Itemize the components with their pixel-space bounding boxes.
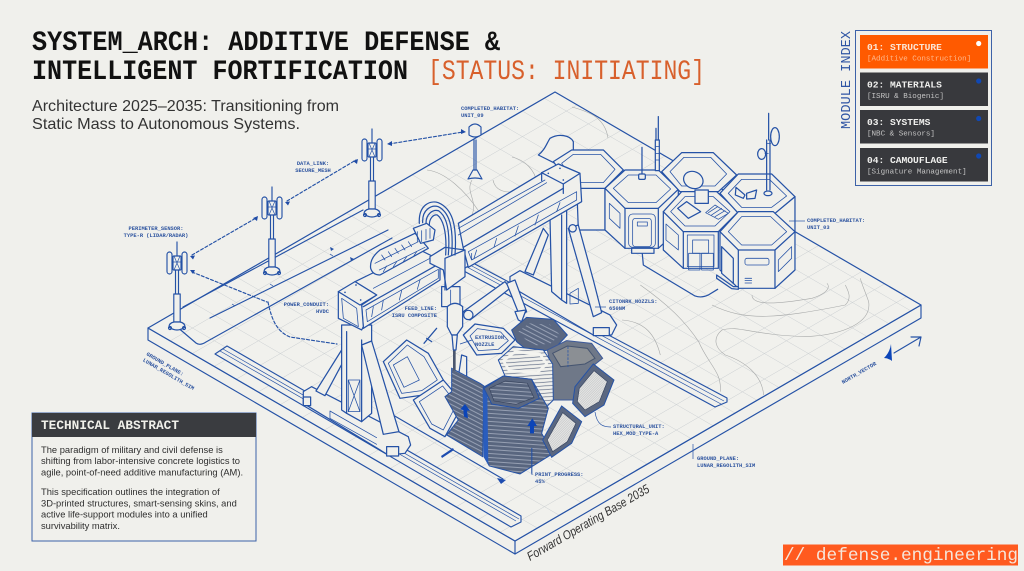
module 01 structure <box>860 35 988 68</box>
label: ground plane right: LUNAR_REGOLITH_SIM <box>697 463 755 469</box>
module 04 camouflage: 04: CAMOUFLAGE <box>867 155 948 166</box>
dome behind habitat <box>538 135 573 163</box>
left printed wall <box>445 368 484 457</box>
subtitle <box>32 98 339 133</box>
label: perimeter sensor: PERIMETER_SENSOR: <box>128 226 184 232</box>
gantry left leg <box>303 325 411 456</box>
module index heading: MODULE INDEX <box>840 31 855 129</box>
right end block <box>542 164 580 193</box>
hex module with door <box>605 170 678 253</box>
habitat cluster <box>538 113 795 297</box>
label: extrusion nozzle: NOZZLE <box>475 342 495 348</box>
hatched hex panels <box>573 364 614 417</box>
perimeter sensor tower 2 <box>262 187 282 275</box>
ground plate <box>148 92 921 554</box>
abstract paragraph 2: This specification outlines the integration of <box>41 487 220 497</box>
print bed dimension line <box>393 415 506 484</box>
label: ground plane right: GROUND_PLANE: <box>697 456 739 462</box>
module 03 systems: [NBC & Sensors] <box>867 130 935 138</box>
print head <box>442 287 463 350</box>
right leg <box>510 208 617 336</box>
label: feed line: ISRU COMPOSITE <box>392 313 438 319</box>
hex module back center <box>662 153 737 192</box>
cable arch <box>413 202 455 255</box>
dashed data links <box>190 129 466 344</box>
label: structural unit: HEX_MOD_TYPE-A <box>613 431 659 437</box>
abstract paragraph 2: survivability matrix. <box>41 521 120 531</box>
robotic arm <box>463 280 527 322</box>
label: print progress: 45% <box>535 479 545 485</box>
module 02 materials: 02: MATERIALS <box>867 80 942 90</box>
module 03 systems <box>860 110 988 144</box>
label: power conduit: POWER_CONDUIT: <box>284 302 329 308</box>
hex module back left <box>577 183 605 230</box>
terrain contour lines <box>427 107 869 395</box>
title: INTELLIGENT FORTIFICATION <box>32 56 408 87</box>
module 02 materials: [ISRU & Biogenic] <box>867 93 944 101</box>
growth arrow left <box>460 404 470 418</box>
abstract paragraph 1: shifting from labor-intensive concrete logistics to <box>41 456 240 466</box>
north vector arrow <box>884 337 921 361</box>
title <box>32 27 705 87</box>
growth arrow right <box>527 418 537 433</box>
label: structural unit: STRUCTURAL_UNIT: <box>613 424 665 430</box>
label: completed habitat right: UNIT_03 <box>807 225 830 231</box>
label: forward operating base: Forward Operating Base 2035 <box>524 482 652 564</box>
back dark hex <box>512 317 567 353</box>
leader lines <box>460 221 805 475</box>
carriage <box>430 247 465 290</box>
abstract paragraph 1: agile, point-of-need additive manufacturing (AM). <box>41 467 243 477</box>
label: extrusion nozzle: EXTRUSION_ <box>475 335 507 341</box>
label: data link: SECURE_MESH <box>295 168 331 174</box>
utility line with arrow <box>642 254 718 297</box>
hex module front right <box>717 212 795 289</box>
label: gantry nozzles: 650NM <box>609 306 625 312</box>
label: perimeter sensor: TYPE-R (LIDAR/RADAR) <box>124 233 188 239</box>
rear gantry rail <box>462 263 727 407</box>
power conduits <box>176 210 392 344</box>
left end block <box>338 282 377 330</box>
module 04 camouflage <box>860 148 988 182</box>
right beam section <box>458 164 582 267</box>
abstract paragraph 2: 3D-printed structures, smart-sensing skins, and <box>41 498 237 508</box>
gantry right leg and beam <box>338 164 617 350</box>
label: print progress: PRINT_PROGRESS: <box>535 472 584 478</box>
abstract paragraph 2: active life-support modules into a unified <box>41 510 208 520</box>
right solid hex <box>547 341 603 400</box>
label: completed habitat right: COMPLETED_HABITAT: <box>807 218 865 224</box>
left beam section <box>355 250 440 328</box>
front gantry rail <box>215 346 521 527</box>
label: ground plane left: GROUND_PLANE: <box>145 352 184 378</box>
beacon sensor mast <box>468 124 482 179</box>
label: completed habitat upper: COMPLETED_HABITAT: <box>461 106 519 112</box>
perimeter sensor tower 1 <box>167 242 187 330</box>
label: ground plane left: LUNAR_REGOLITH_SIM <box>142 358 195 392</box>
label: feed line: FEED_LINE: <box>405 306 437 312</box>
rooftop antennas <box>639 113 779 196</box>
front printed wall <box>483 376 553 474</box>
module 02 materials <box>860 72 988 106</box>
module 03 systems: 03: SYSTEMS <box>867 117 931 128</box>
abstract paragraph 1: The paradigm of military and civil defense is <box>41 445 223 455</box>
wireframe hex foundations <box>383 324 515 437</box>
module 01 structure: 01: STRUCTURE <box>867 42 942 53</box>
cable chain <box>371 233 428 275</box>
module 04 camouflage: [Signature Management] <box>867 168 967 176</box>
footer tag: // defense.engineering <box>784 546 1018 566</box>
label: data link: DATA_LINK: <box>297 161 329 167</box>
subtitle: Static Mass to Autonomous Systems. <box>32 116 300 133</box>
label: gantry nozzles: CITONRK_NOZZLS: <box>609 299 658 305</box>
abstract header: TECHNICAL ABSTRACT <box>41 418 179 433</box>
3D printed hex structure <box>445 317 614 474</box>
label: north vector: NORTH_VECTOR <box>841 361 878 386</box>
label: completed habitat upper: UNIT_09 <box>461 113 484 119</box>
hex module center with dish <box>663 168 738 270</box>
module 01 structure: [Additive Construction] <box>867 56 971 64</box>
abstract header <box>32 413 256 437</box>
label: power conduit: HVDC <box>316 309 330 315</box>
hex module right with mast <box>720 174 795 232</box>
panel: technical abstract <box>32 413 256 541</box>
subtitle: Architecture 2025–2035: Transitioning from <box>32 98 339 115</box>
center open hex <box>498 347 553 413</box>
panel: module index <box>856 30 992 186</box>
perimeter sensor tower 3 <box>362 129 382 217</box>
extruded bead feed <box>450 343 458 371</box>
title: SYSTEM_ARCH: ADDITIVE DEFENSE & <box>32 27 500 58</box>
title: [STATUS: INITIATING] <box>428 56 705 87</box>
